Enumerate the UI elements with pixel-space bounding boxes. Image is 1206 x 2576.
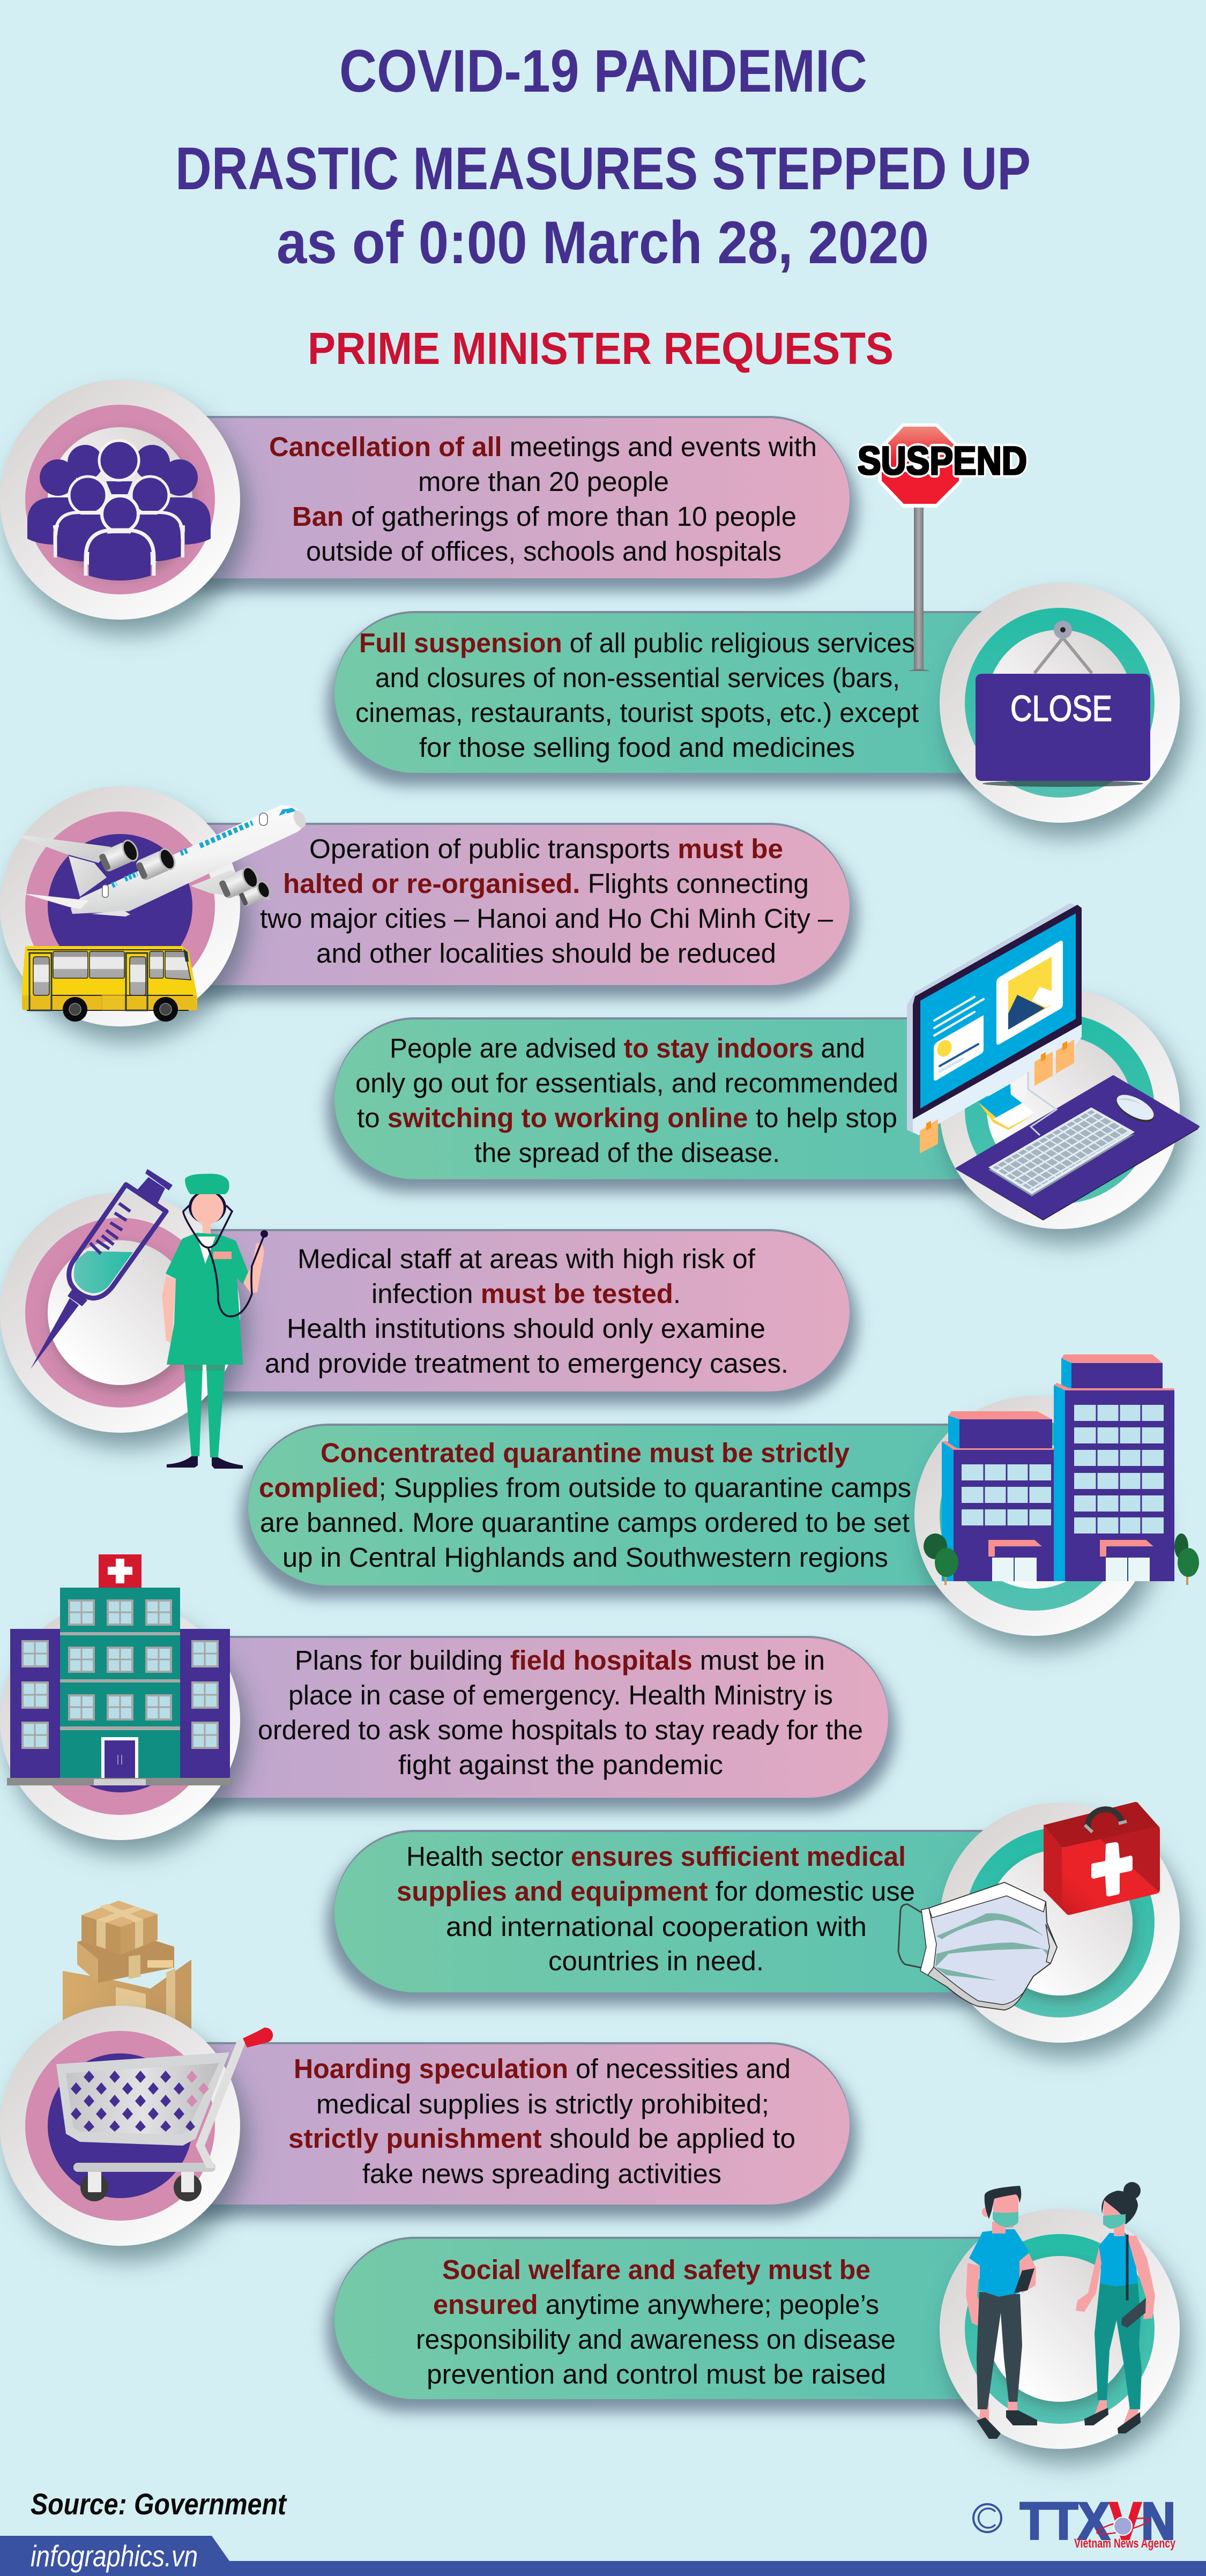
text: field hospitals: fight against the pandemic — [398, 1749, 723, 1780]
icon: syringe — [31, 1169, 173, 1369]
circle badge — [914, 1396, 1155, 1636]
text: suspension: Full suspension of all public religious services — [359, 628, 915, 658]
source note: Source: Government — [31, 2487, 287, 2521]
icon: man with mask — [966, 2186, 1037, 2439]
panel: concentrated quarantine — [248, 1354, 1199, 1636]
logo globe — [1096, 2515, 1150, 2537]
pill background — [334, 1017, 1085, 1179]
icon: close sign: CLOSE — [1010, 688, 1112, 729]
text: social welfare: ensured anytime anywhere; people’s — [433, 2289, 879, 2320]
pill background — [334, 611, 1085, 773]
icon: nurse with stethoscope — [162, 1174, 268, 1469]
text: hoarding: Hoarding speculation of necessities and — [294, 2053, 791, 2084]
pill background — [107, 416, 850, 578]
text: medical staff: Health institutions should only examine — [287, 1313, 765, 1344]
text: social welfare — [416, 2254, 896, 2389]
text: suspension — [355, 628, 919, 763]
icon: shopping cart — [56, 2028, 273, 2201]
text: medical staff: infection must be tested. — [371, 1278, 681, 1309]
panel: stay indoors — [334, 903, 1198, 1229]
panel: medical staff — [0, 1169, 850, 1469]
text: medical staff: Medical staff at areas with high risk of — [297, 1244, 756, 1274]
text: medical staff: and provide treatment to emergency cases. — [265, 1348, 788, 1379]
text: suspension: cinemas, restaurants, tourist spots, etc.) except — [355, 697, 919, 728]
text: transport: two major cities – Hanoi and Ho Chi Minh City – — [260, 903, 833, 934]
text: transport: Operation of public transports must be — [309, 833, 783, 864]
text: indoors: People are advised to stay indoors and — [390, 1033, 865, 1063]
text: indoors: only go out for essentials, and recommended — [355, 1068, 898, 1098]
text: indoors — [355, 1033, 898, 1168]
text: medical staff — [265, 1244, 788, 1379]
icon: cardboard boxes — [63, 1901, 191, 2037]
icon: suspend stop sign: SUSPEND — [858, 438, 1027, 483]
circle badge — [0, 2006, 240, 2246]
heading: prime minister requests: PRIME MINISTER REQUESTS — [308, 323, 894, 374]
pill background — [248, 1424, 1084, 1585]
icon: hospital — [7, 1554, 232, 1785]
text: supplies: Health sector ensures sufficient medical — [406, 1841, 906, 1872]
icon: close sign — [976, 621, 1150, 787]
copyright symbol — [973, 2504, 1001, 2532]
text: quarantine: Concentrated quarantine must be strictly — [321, 1438, 850, 1468]
text: cancellation: outside of offices, schools and hospitals — [306, 536, 781, 567]
text: supplies — [397, 1841, 915, 1976]
icon: group of people — [27, 441, 211, 580]
icon: woman with mask — [1076, 2182, 1155, 2433]
circle badge — [940, 989, 1180, 1229]
text: hoarding: strictly punishment should be applied to — [288, 2123, 795, 2154]
text: suspension: and closures of non-essential services (bars, — [375, 662, 900, 693]
panel: cancellation of meetings — [0, 379, 850, 620]
panel: medical supplies — [334, 1802, 1180, 2043]
pill background — [334, 2237, 1085, 2399]
circle badge — [0, 1600, 240, 1840]
title: drastic measures stepped up: DRASTIC MEASURES STEPPED UP — [175, 135, 1031, 202]
icon: surgical mask — [898, 1882, 1057, 2010]
icon: airplane — [10, 805, 308, 917]
footer website: infographics.vn — [31, 2539, 198, 2573]
circle badge — [0, 379, 240, 620]
panel: public transport — [0, 786, 850, 1026]
panel: hoarding speculation — [0, 1901, 850, 2246]
title: date: as of 0:00 March 28, 2020 — [277, 209, 929, 276]
text: quarantine — [259, 1438, 911, 1573]
text: supplies: and international cooperation with — [446, 1911, 867, 1942]
pill background — [107, 1229, 850, 1391]
icon: suspend stop sign — [858, 423, 1027, 671]
text: cancellation: Cancellation of all meetings and events with — [269, 431, 817, 462]
text: hoarding — [288, 2053, 795, 2189]
text: indoors: the spread of the disease. — [474, 1137, 780, 1168]
text: indoors: to switching to working online to help stop — [357, 1103, 897, 1133]
text: quarantine: are banned. More quarantine camps ordered to be set — [260, 1507, 910, 1538]
text: hoarding: fake news spreading activities — [362, 2158, 721, 2189]
text: quarantine: up in Central Highlands and Southwestern regions — [282, 1542, 888, 1573]
circle badge — [0, 786, 240, 1026]
pill background — [107, 2042, 850, 2205]
circle badge — [940, 1803, 1180, 2043]
icon: first aid kit — [1044, 1802, 1160, 1915]
text: field hospitals: place in case of emergency. Health Ministry is — [288, 1680, 833, 1710]
pill background — [107, 1636, 888, 1798]
text: field hospitals — [258, 1645, 863, 1780]
text: suspension: for those selling food and medicines — [419, 732, 855, 763]
text: supplies: supplies and equipment for domestic use — [397, 1876, 915, 1907]
circle badge — [940, 583, 1180, 823]
text: social welfare: Social welfare and safety must be — [442, 2254, 870, 2285]
footer band — [0, 2536, 1206, 2576]
pill background — [334, 1830, 1085, 1992]
text: cancellation — [269, 431, 817, 567]
icon: quarantine buildings — [924, 1354, 1199, 1585]
panel: full suspension — [334, 423, 1180, 823]
text: social welfare: responsibility and awareness on disease — [416, 2324, 896, 2355]
pill background — [107, 823, 850, 985]
text: quarantine: complied; Supplies from outside to quarantine camps — [259, 1472, 911, 1503]
text: cancellation: more than 20 people — [418, 466, 669, 497]
text: transport — [260, 833, 833, 969]
circle badge — [0, 1193, 240, 1433]
panel: social welfare — [334, 2182, 1180, 2449]
text: social welfare: prevention and control must be raised — [427, 2359, 886, 2389]
icon: computer and keyboard — [907, 903, 1198, 1220]
text: transport: and other localities should be reduced — [316, 938, 776, 969]
text: hoarding: medical supplies is strictly prohibited; — [316, 2089, 769, 2119]
text: supplies: countries in need. — [548, 1946, 764, 1976]
panel: field hospitals — [0, 1554, 888, 1840]
text: field hospitals: ordered to ask some hospitals to stay ready for the — [258, 1715, 863, 1745]
title: COVID-19 pandemic: COVID-19 PANDEMIC — [339, 38, 867, 105]
text: cancellation: Ban of gatherings of more than 10 people — [292, 501, 796, 532]
circle badge — [940, 2209, 1180, 2449]
icon: yellow bus — [22, 946, 197, 1022]
logo wordmark: TTXVN — [1020, 2492, 1175, 2550]
logo: TTXVN Vietnam News Agency — [973, 2492, 1175, 2551]
text: transport: halted or re-organised. Flights connecting — [283, 868, 809, 899]
text: field hospitals: Plans for building field hospitals must be in — [295, 1645, 825, 1676]
